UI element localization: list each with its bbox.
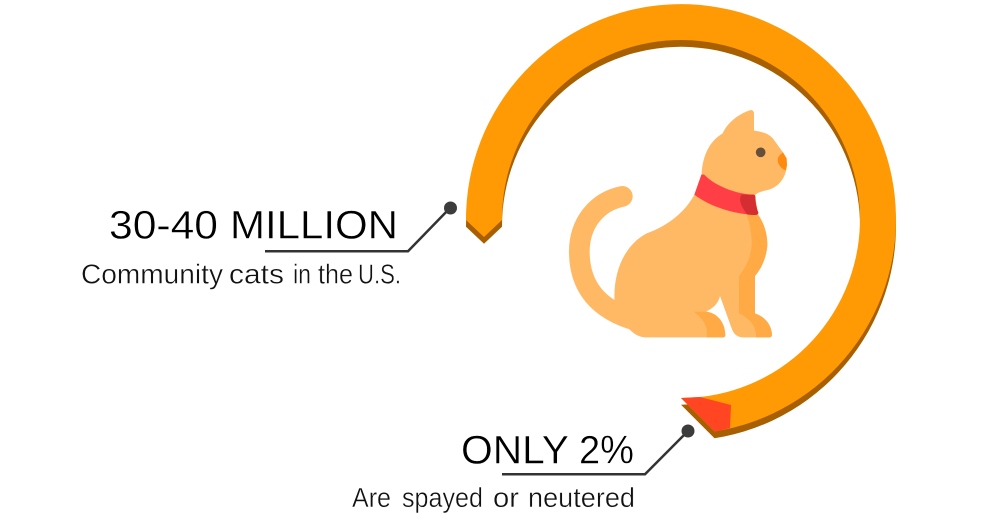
callout heading bbox=[461, 428, 634, 472]
callout subtext: U.S. bbox=[358, 258, 401, 290]
callout heading: 30-40 bbox=[109, 204, 218, 248]
callout subtext: Are bbox=[352, 482, 391, 513]
red 2% segment bbox=[681, 397, 731, 432]
callout subtext: cats bbox=[229, 258, 284, 290]
callout heading: 2% bbox=[579, 428, 634, 472]
callout subtext bbox=[81, 258, 401, 290]
callout subtext bbox=[352, 482, 635, 513]
ring shadow bbox=[466, 11, 896, 438]
cat tail bbox=[579, 196, 637, 321]
cat collar bbox=[694, 174, 758, 215]
callout: 30-40 million bbox=[81, 202, 457, 290]
callout heading bbox=[109, 204, 398, 248]
callout subtext: in bbox=[293, 258, 311, 290]
leader dot bbox=[682, 424, 694, 438]
icon: cat bbox=[579, 110, 787, 337]
callout subtext: or bbox=[493, 482, 519, 513]
callout heading: MILLION bbox=[230, 204, 398, 248]
collar shade bbox=[740, 194, 758, 215]
cat front paw shading bbox=[693, 312, 725, 337]
callout subtext: the bbox=[318, 258, 353, 290]
cat far leg shading bbox=[739, 215, 772, 337]
callout subtext: spayed bbox=[402, 482, 483, 513]
callout heading: ONLY bbox=[461, 428, 569, 472]
cat body and head bbox=[614, 110, 787, 337]
leader line bbox=[265, 208, 450, 251]
callout subtext: Community bbox=[81, 258, 223, 290]
cat eye bbox=[756, 147, 765, 157]
leader line bbox=[502, 431, 688, 474]
callout subtext: neutered bbox=[528, 482, 635, 513]
leader dot bbox=[444, 202, 457, 214]
cat nose bbox=[778, 152, 787, 170]
ring face bbox=[466, 4, 896, 432]
ring: progress arc bbox=[466, 4, 896, 438]
callout: only 2% bbox=[352, 424, 694, 513]
